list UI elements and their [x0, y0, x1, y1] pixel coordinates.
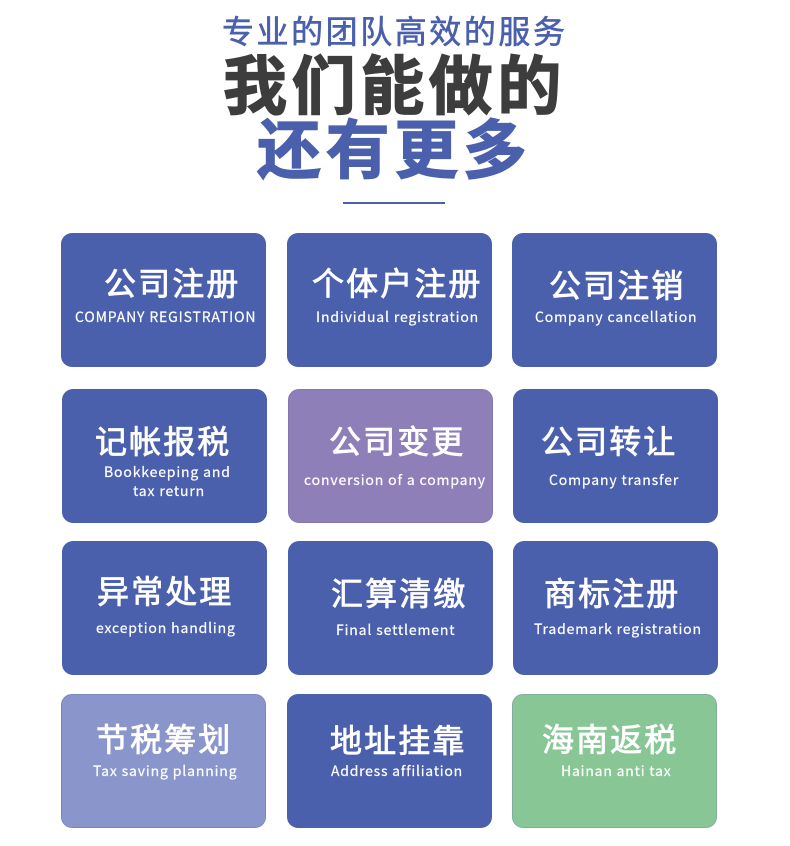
card: company cancellation [512, 233, 717, 367]
card title: 公司注册 [104, 259, 240, 305]
card title: 异常处理 [97, 567, 233, 613]
card subtitle: Final settlement [336, 620, 455, 640]
card: trademark registration [513, 541, 718, 675]
card subtitle line 2: tax return [133, 481, 205, 501]
card subtitle: exception handling [96, 618, 236, 638]
subtitle: 专业的团队高效的服务 [222, 7, 568, 53]
card: bookkeeping [62, 389, 267, 523]
card title: 节税筹划 [96, 715, 232, 761]
card subtitle: Company cancellation [535, 307, 697, 327]
card: Hainan anti tax [512, 694, 717, 828]
card subtitle: Individual registration [316, 307, 479, 327]
main title line 2: 还有更多 [257, 100, 531, 192]
main title line 1: 我们能做的 [223, 36, 566, 128]
card: company registration [61, 233, 266, 367]
card: individual registration [287, 233, 492, 367]
card title: 公司转让 [541, 417, 677, 463]
card subtitle: Address affiliation [331, 761, 463, 781]
card: tax saving planning [61, 694, 266, 828]
card subtitle: COMPANY REGISTRATION [75, 307, 256, 327]
card title: 公司变更 [329, 417, 465, 463]
card subtitle: Trademark registration [534, 619, 702, 639]
divider [343, 202, 445, 204]
card: company transfer [513, 389, 718, 523]
card: address affiliation [287, 694, 492, 828]
card title: 个体户注册 [312, 259, 483, 305]
card title: 地址挂靠 [330, 716, 466, 762]
card title: 商标注册 [544, 569, 680, 615]
card: company conversion [288, 389, 493, 523]
card title: 记帐报税 [95, 417, 231, 463]
card title: 海南返税 [542, 715, 678, 761]
card subtitle: conversion of a company [304, 470, 486, 490]
card subtitle: Company transfer [549, 470, 679, 490]
card: exception handling [62, 541, 267, 675]
card subtitle: Tax saving planning [93, 761, 237, 781]
card title: 公司注销 [549, 261, 685, 307]
card subtitle: Hainan anti tax [561, 761, 672, 781]
card: final settlement [288, 541, 493, 675]
card subtitle line 1: Bookkeeping and [104, 462, 231, 482]
card title: 汇算清缴 [331, 569, 467, 615]
